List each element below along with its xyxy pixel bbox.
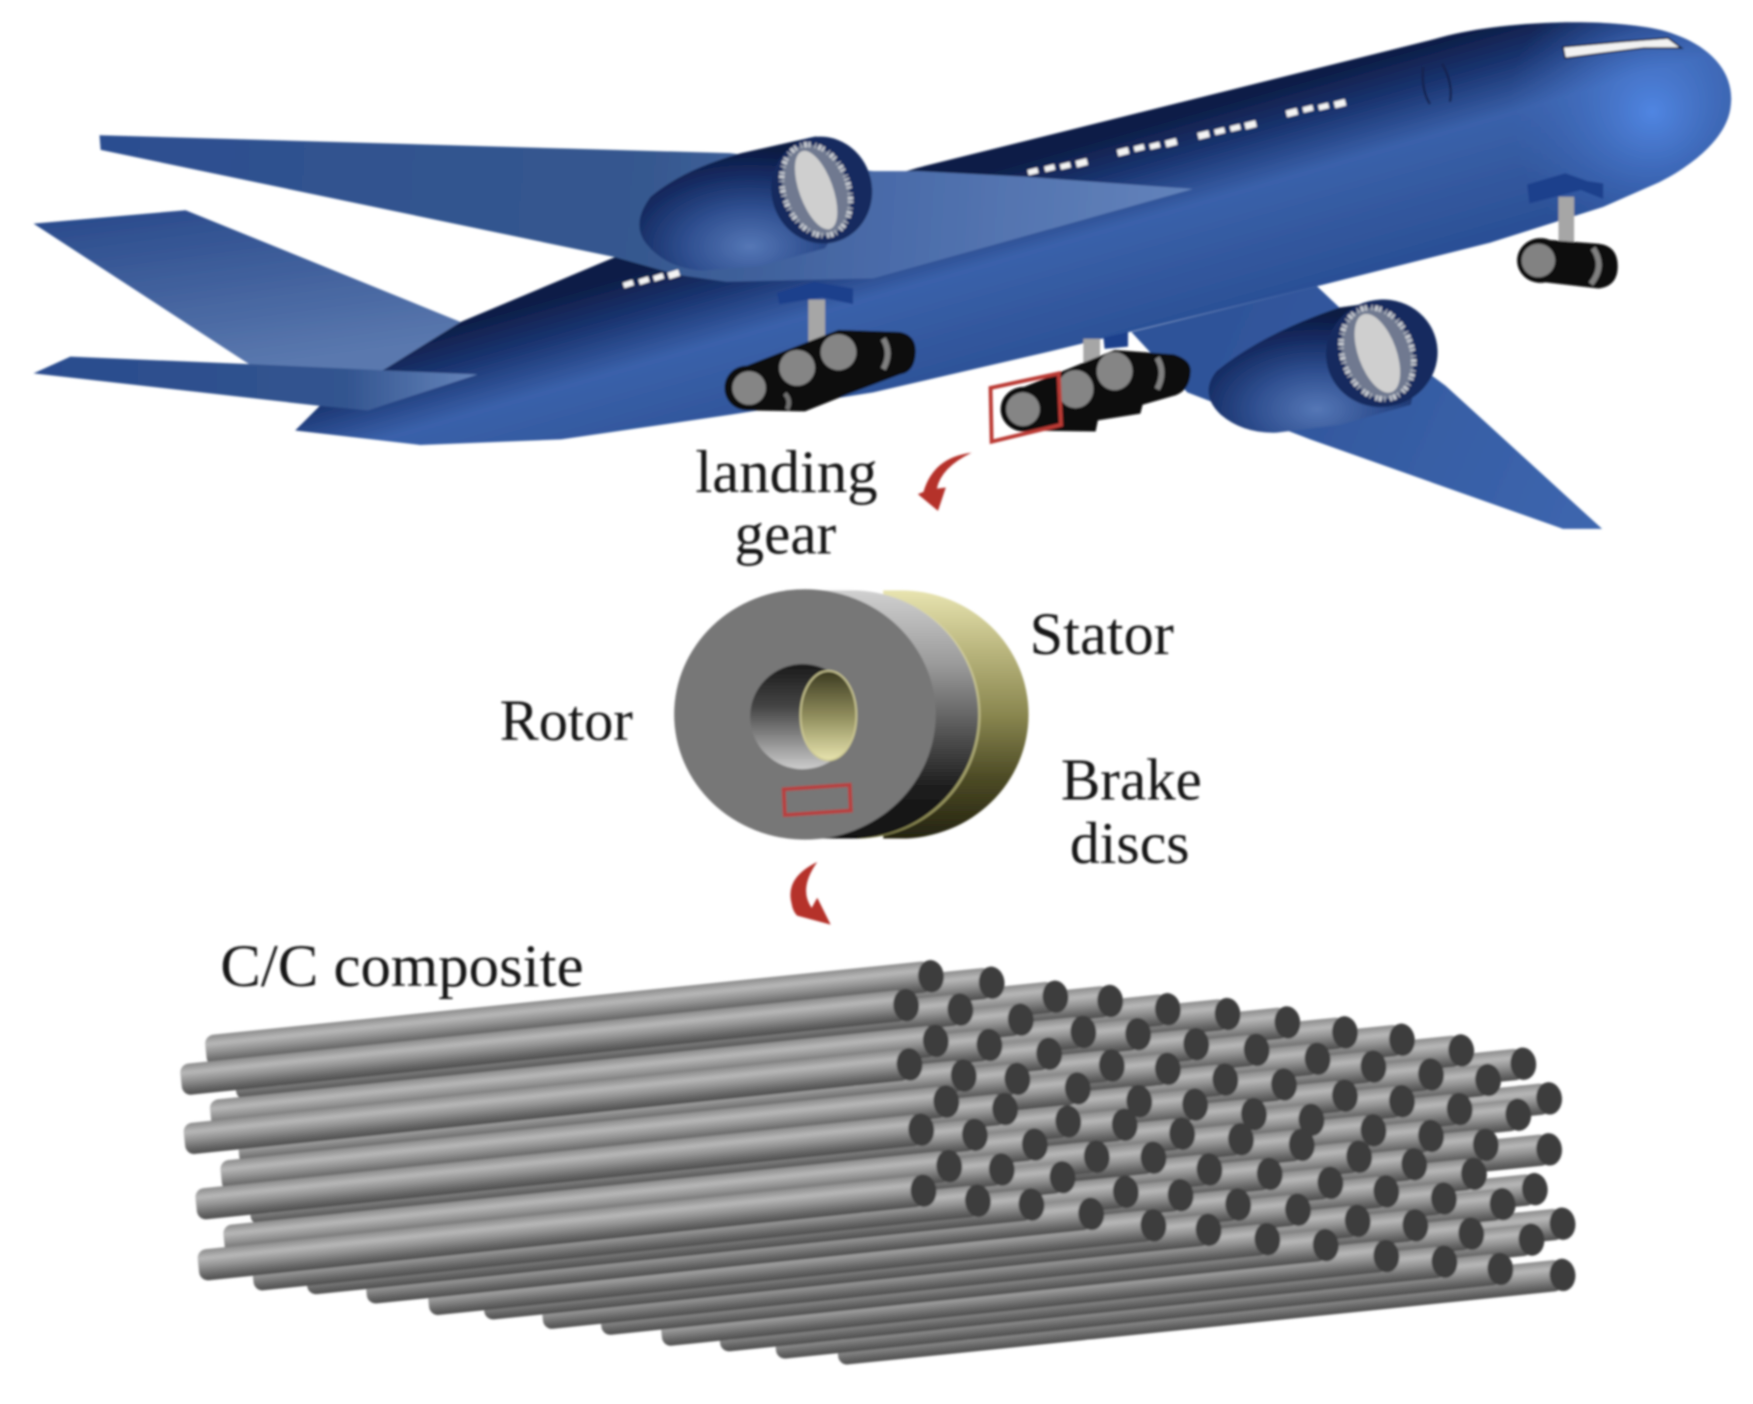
stator rim line: [735, 593, 980, 839]
airplane: [34, 0, 1753, 529]
label: Stator: Stator: [1030, 601, 1174, 668]
rotor face: [674, 589, 936, 840]
arrow: wheel to brake disc: [918, 453, 972, 511]
lower horizontal stabiliser: [34, 357, 477, 410]
arrow: disc to composite: [790, 862, 831, 925]
red selection box on wheel: [991, 373, 1061, 442]
centre hole: [750, 664, 855, 769]
rear gear bracket: [777, 282, 853, 304]
brake disc: [674, 589, 1029, 840]
nose gear wheels: [1541, 239, 1618, 288]
nose gear strut: [1558, 197, 1574, 244]
label: landing gear: landing: [695, 439, 878, 506]
front main landing gear: [991, 332, 1191, 442]
near wing: [100, 135, 1193, 282]
label: Rotor: Rotor: [500, 688, 633, 753]
rear gear wheels: [732, 371, 766, 405]
far wing: [1131, 286, 1602, 529]
nose landing gear: [1517, 173, 1618, 288]
front gear wheel bodies: [1024, 350, 1191, 432]
front gear strut: [1083, 339, 1100, 372]
fuselage body: [295, 22, 1731, 445]
rear main landing gear: [724, 282, 916, 411]
label: landing gear: [695, 439, 878, 566]
front gear wheels: [1058, 370, 1093, 408]
label: Brake discs: discs: [1070, 810, 1190, 876]
label: Brake discs: Brake: [1061, 746, 1202, 812]
nose highlight: [1534, 22, 1732, 208]
far engine nacelle: [1208, 302, 1425, 433]
near engine fan: [760, 126, 884, 254]
label: C/C composite: C/C composite: [220, 933, 584, 1000]
C/C composite fibre bundle: [179, 959, 1577, 1366]
rear gear strut: [808, 300, 825, 344]
front gear bracket: [1103, 332, 1128, 349]
label: Brake discs: [1061, 746, 1202, 876]
nose gear bracket: [1527, 173, 1603, 203]
passenger windows: [623, 99, 1346, 288]
stator bore: [800, 671, 856, 760]
stator: [883, 590, 1029, 839]
far engine fan: [1315, 288, 1449, 419]
near engine: [639, 126, 884, 271]
rotor side: [807, 590, 978, 839]
near engine nacelle: [639, 136, 861, 271]
far engine: [1208, 288, 1449, 433]
cockpit windows: [1563, 38, 1681, 58]
label: landing gear: gear: [735, 500, 837, 566]
red selection box on disc: [784, 785, 851, 815]
fuselage: [295, 0, 1753, 445]
upper horizontal stabiliser: [34, 210, 461, 376]
rear gear wheel bodies: [747, 330, 916, 411]
door: [1423, 64, 1451, 104]
highlighted wheel: [1001, 387, 1048, 432]
